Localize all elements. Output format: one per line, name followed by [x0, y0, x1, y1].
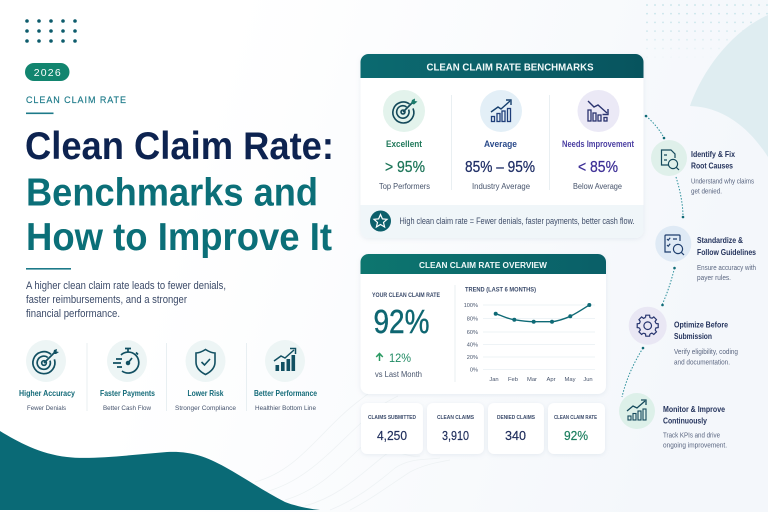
benchmarks header	[360, 54, 644, 78]
process connector	[622, 116, 683, 397]
benefit: better performance: Better Performance	[254, 389, 318, 398]
benefit: faster payments: Faster Payments	[100, 389, 156, 398]
stat card: clean claims: 3,910	[442, 428, 469, 443]
benefit: faster payments	[100, 340, 156, 412]
benchmark: average: Industry Average	[472, 182, 531, 191]
stat card: denied claims: DENIED CLAIMS	[497, 415, 535, 421]
trend chart: Jan	[489, 377, 499, 383]
stat card: clean claim rate	[548, 403, 605, 454]
trend chart: Mar	[527, 377, 537, 383]
benchmarks header: CLEAN CLAIM RATE BENCHMARKS	[426, 62, 594, 74]
rate summary	[372, 292, 441, 379]
rate summary: 12%	[389, 351, 411, 365]
benchmark: excellent: Top Performers	[379, 182, 430, 191]
benchmark: excellent	[379, 90, 430, 191]
benchmark dividers	[452, 95, 550, 190]
year badge	[25, 63, 70, 81]
trend chart: 40%	[467, 342, 478, 348]
benchmark: average: Average	[484, 139, 517, 149]
connector dots	[642, 115, 684, 349]
benefit: lower risk: Lower Risk	[188, 389, 224, 398]
wave footer	[0, 431, 320, 510]
step 3: and documentation.	[674, 360, 730, 366]
step 2	[655, 226, 756, 282]
benchmark: needs improvement: Needs Improvement	[562, 139, 634, 149]
benchmark: average: 85% – 95%	[465, 159, 535, 176]
overview header: CLEAN CLAIM RATE OVERVIEW	[419, 260, 548, 270]
step 1	[651, 140, 754, 196]
panel: benchmarks	[360, 54, 644, 238]
stat card: denied claims: 340	[505, 428, 526, 443]
step 2: Follow Guidelines	[697, 247, 756, 257]
trend chart: 60%	[467, 330, 478, 336]
top right blob	[690, 15, 768, 157]
stat card: clean claims	[427, 403, 484, 454]
step 2: Standardize &	[697, 235, 743, 245]
step 4: ongoing improvement.	[663, 442, 727, 450]
benchmark note	[360, 205, 644, 238]
step 1: Understand why claims	[691, 178, 754, 186]
step 4	[619, 393, 727, 450]
step 2: payer rules.	[697, 275, 731, 282]
overview header	[360, 254, 606, 274]
benchmark: average	[465, 90, 535, 191]
intro paragraph: A higher clean claim rate leads to fewer denials,	[26, 280, 226, 292]
step 3: Optimize Before	[674, 320, 728, 330]
trend chart	[464, 286, 595, 383]
year badge: 2026	[34, 67, 61, 79]
step 1: get denied.	[691, 188, 722, 196]
stat card: clean claims: CLEAN CLAIMS	[437, 415, 474, 421]
title	[25, 125, 334, 259]
trend chart: May	[565, 377, 576, 383]
benefit: lower risk	[175, 340, 236, 412]
step 3: Verify eligibility, coding	[674, 349, 738, 356]
trend chart: Apr	[546, 377, 556, 383]
trend chart: Feb	[508, 377, 518, 383]
left column	[19, 19, 334, 412]
title: How to Improve It	[26, 216, 332, 259]
benchmark: excellent: > 95%	[385, 159, 425, 176]
trend chart: 0%	[470, 368, 478, 374]
dot pattern top right	[646, 4, 768, 50]
benefit: better performance	[254, 340, 318, 412]
step 2: Ensure accuracy with	[697, 265, 756, 272]
benefit: higher accuracy: Fewer Denials	[27, 405, 67, 412]
stat card: clean claim rate: 92%	[564, 428, 588, 443]
rate summary: 92%	[374, 303, 430, 340]
stat card: denied claims	[488, 403, 544, 454]
trend chart: 80%	[467, 316, 478, 322]
benchmark: needs improvement: < 85%	[578, 159, 618, 176]
step 1: Root Causes	[691, 160, 733, 170]
stat card: claims submitted: CLAIMS SUBMITTED	[368, 415, 416, 421]
benchmark: needs improvement: Below Average	[573, 182, 622, 191]
stat card: clean claim rate: CLEAN CLAIM RATE	[554, 415, 597, 421]
stat card: claims submitted: 4,250	[377, 428, 407, 443]
benefit: lower risk: Stronger Compliance	[175, 405, 236, 412]
intro paragraph: faster reimbursements, and a stronger	[26, 294, 187, 306]
benefit: faster payments: Better Cash Flow	[103, 405, 151, 412]
trend chart: Jun	[583, 377, 593, 383]
benefit dividers	[87, 343, 246, 411]
title: Benchmarks and	[26, 172, 318, 214]
rate summary: vs Last Month	[375, 369, 422, 379]
step 4: Continuously	[663, 416, 707, 426]
step 1: Identify & Fix	[691, 149, 735, 159]
benefit: better performance: Healthier Bottom Line	[255, 405, 316, 412]
contour lines	[255, 376, 450, 510]
step 4: Monitor & Improve	[663, 404, 725, 414]
step 3: Submission	[674, 331, 712, 341]
dot grid icon	[25, 19, 77, 43]
eyebrow: CLEAN CLAIM RATE	[26, 95, 126, 105]
trend chart: 100%	[464, 303, 478, 309]
step 4: Track KPIs and drive	[663, 432, 720, 440]
stat card: claims submitted	[361, 403, 423, 454]
benefit: higher accuracy: Higher Accuracy	[19, 389, 76, 398]
benchmark note: High clean claim rate = Fewer denials, faster payments, better cash flow.	[400, 216, 634, 226]
trend chart: TREND (LAST 6 MONTHS)	[465, 286, 536, 294]
intro paragraph: financial performance.	[26, 308, 120, 320]
benchmark: needs improvement	[562, 90, 634, 191]
benefit: higher accuracy	[19, 340, 76, 412]
step 3	[629, 307, 738, 366]
benchmark: excellent: Excellent	[386, 139, 422, 149]
title: Clean Claim Rate:	[25, 125, 334, 168]
panel: overview	[360, 254, 606, 394]
rate summary: YOUR CLEAN CLAIM RATE	[372, 292, 441, 299]
trend chart: 20%	[467, 355, 478, 361]
intro paragraph	[26, 280, 226, 320]
